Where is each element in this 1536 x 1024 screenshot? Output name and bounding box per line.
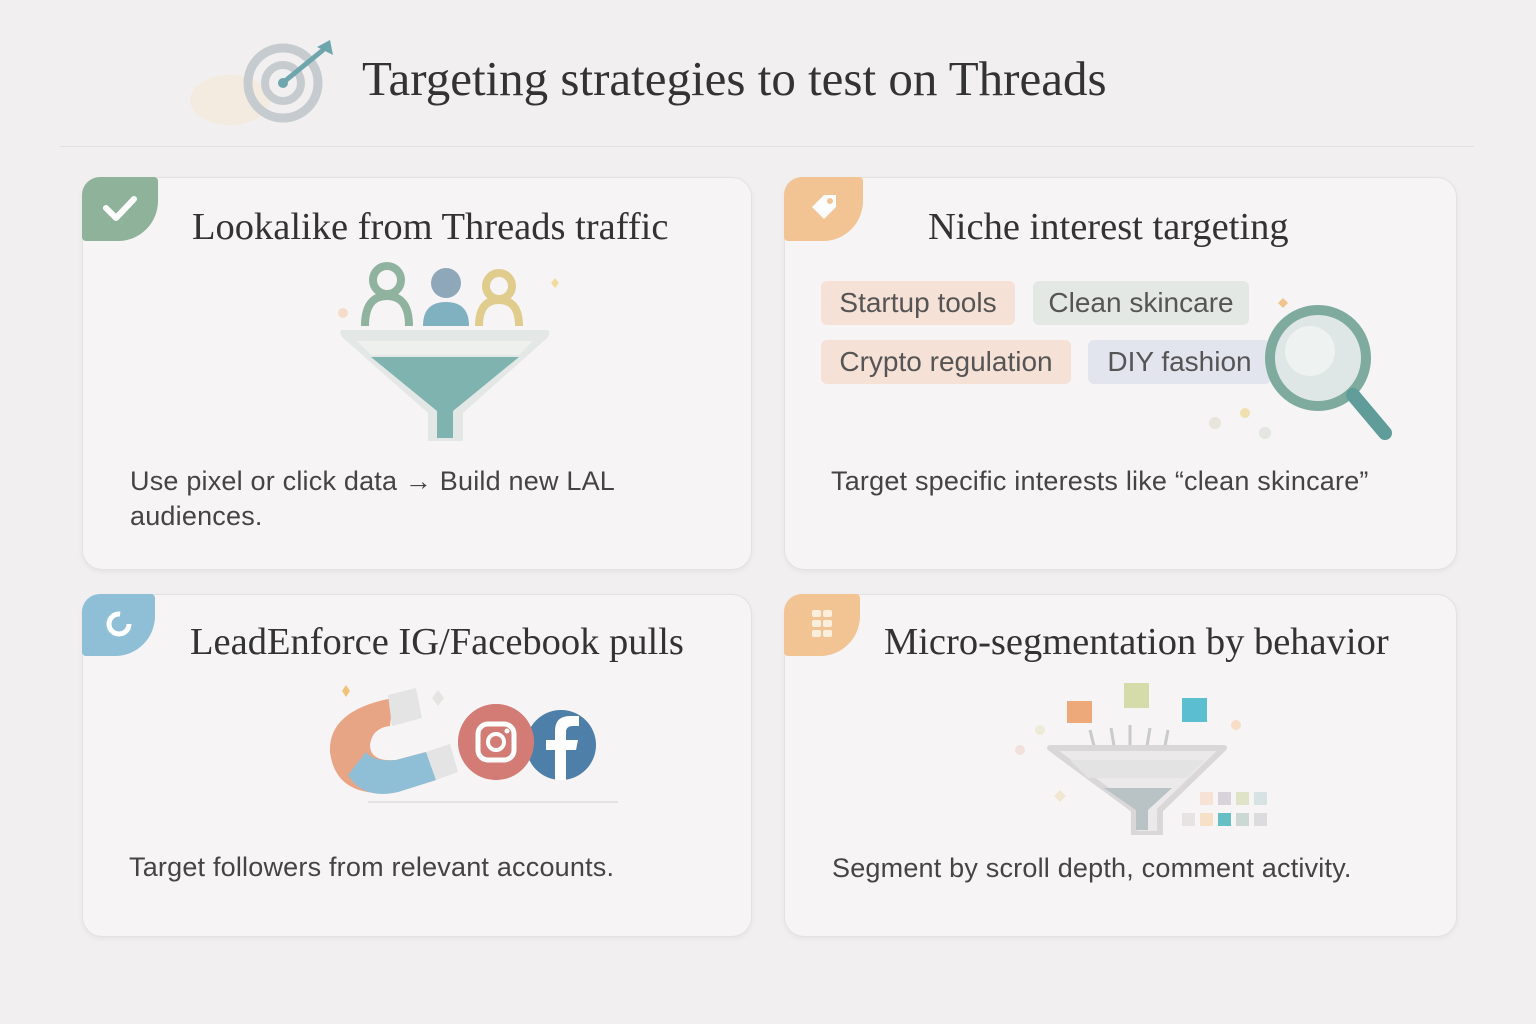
panel: niche interest [784,177,1457,570]
panel: lookalike [82,177,752,570]
heading: Micro-segmentation by behavior [884,621,1389,663]
heading: Lookalike from Threads traffic [192,206,668,248]
heading: LeadEnforce IG/Facebook pulls [190,621,684,663]
icon: grid badge [784,594,860,656]
tags: Startup tools [839,287,997,318]
icon: tag badge [784,177,863,241]
icon: refresh badge [82,594,155,656]
tags: DIY fashion [1107,346,1252,377]
heading: Niche interest targeting [928,206,1289,248]
icon: segmentation funnel [1015,683,1267,835]
icon: magnifier [1209,298,1392,440]
body text: Target specific interests like “clean skincare” [831,466,1369,496]
body text: Use pixel or click data → Build new LAL audiences. [130,466,614,531]
panel: micro-segmentation [784,594,1457,937]
icon: target [190,40,333,125]
title: Targeting strategies to test on Threads [362,51,1107,106]
icon: magnet with instagram and facebook [330,685,618,803]
body text: Segment by scroll depth, comment activity. [832,853,1352,883]
panel: leadenforce [82,594,752,937]
tags: Clean skincare [1048,287,1234,318]
tags: Crypto regulation [839,346,1053,377]
icon: check badge [82,177,158,241]
tags [821,281,1270,384]
body text: Target followers from relevant accounts. [129,852,614,882]
icon: people funnel [338,262,559,441]
